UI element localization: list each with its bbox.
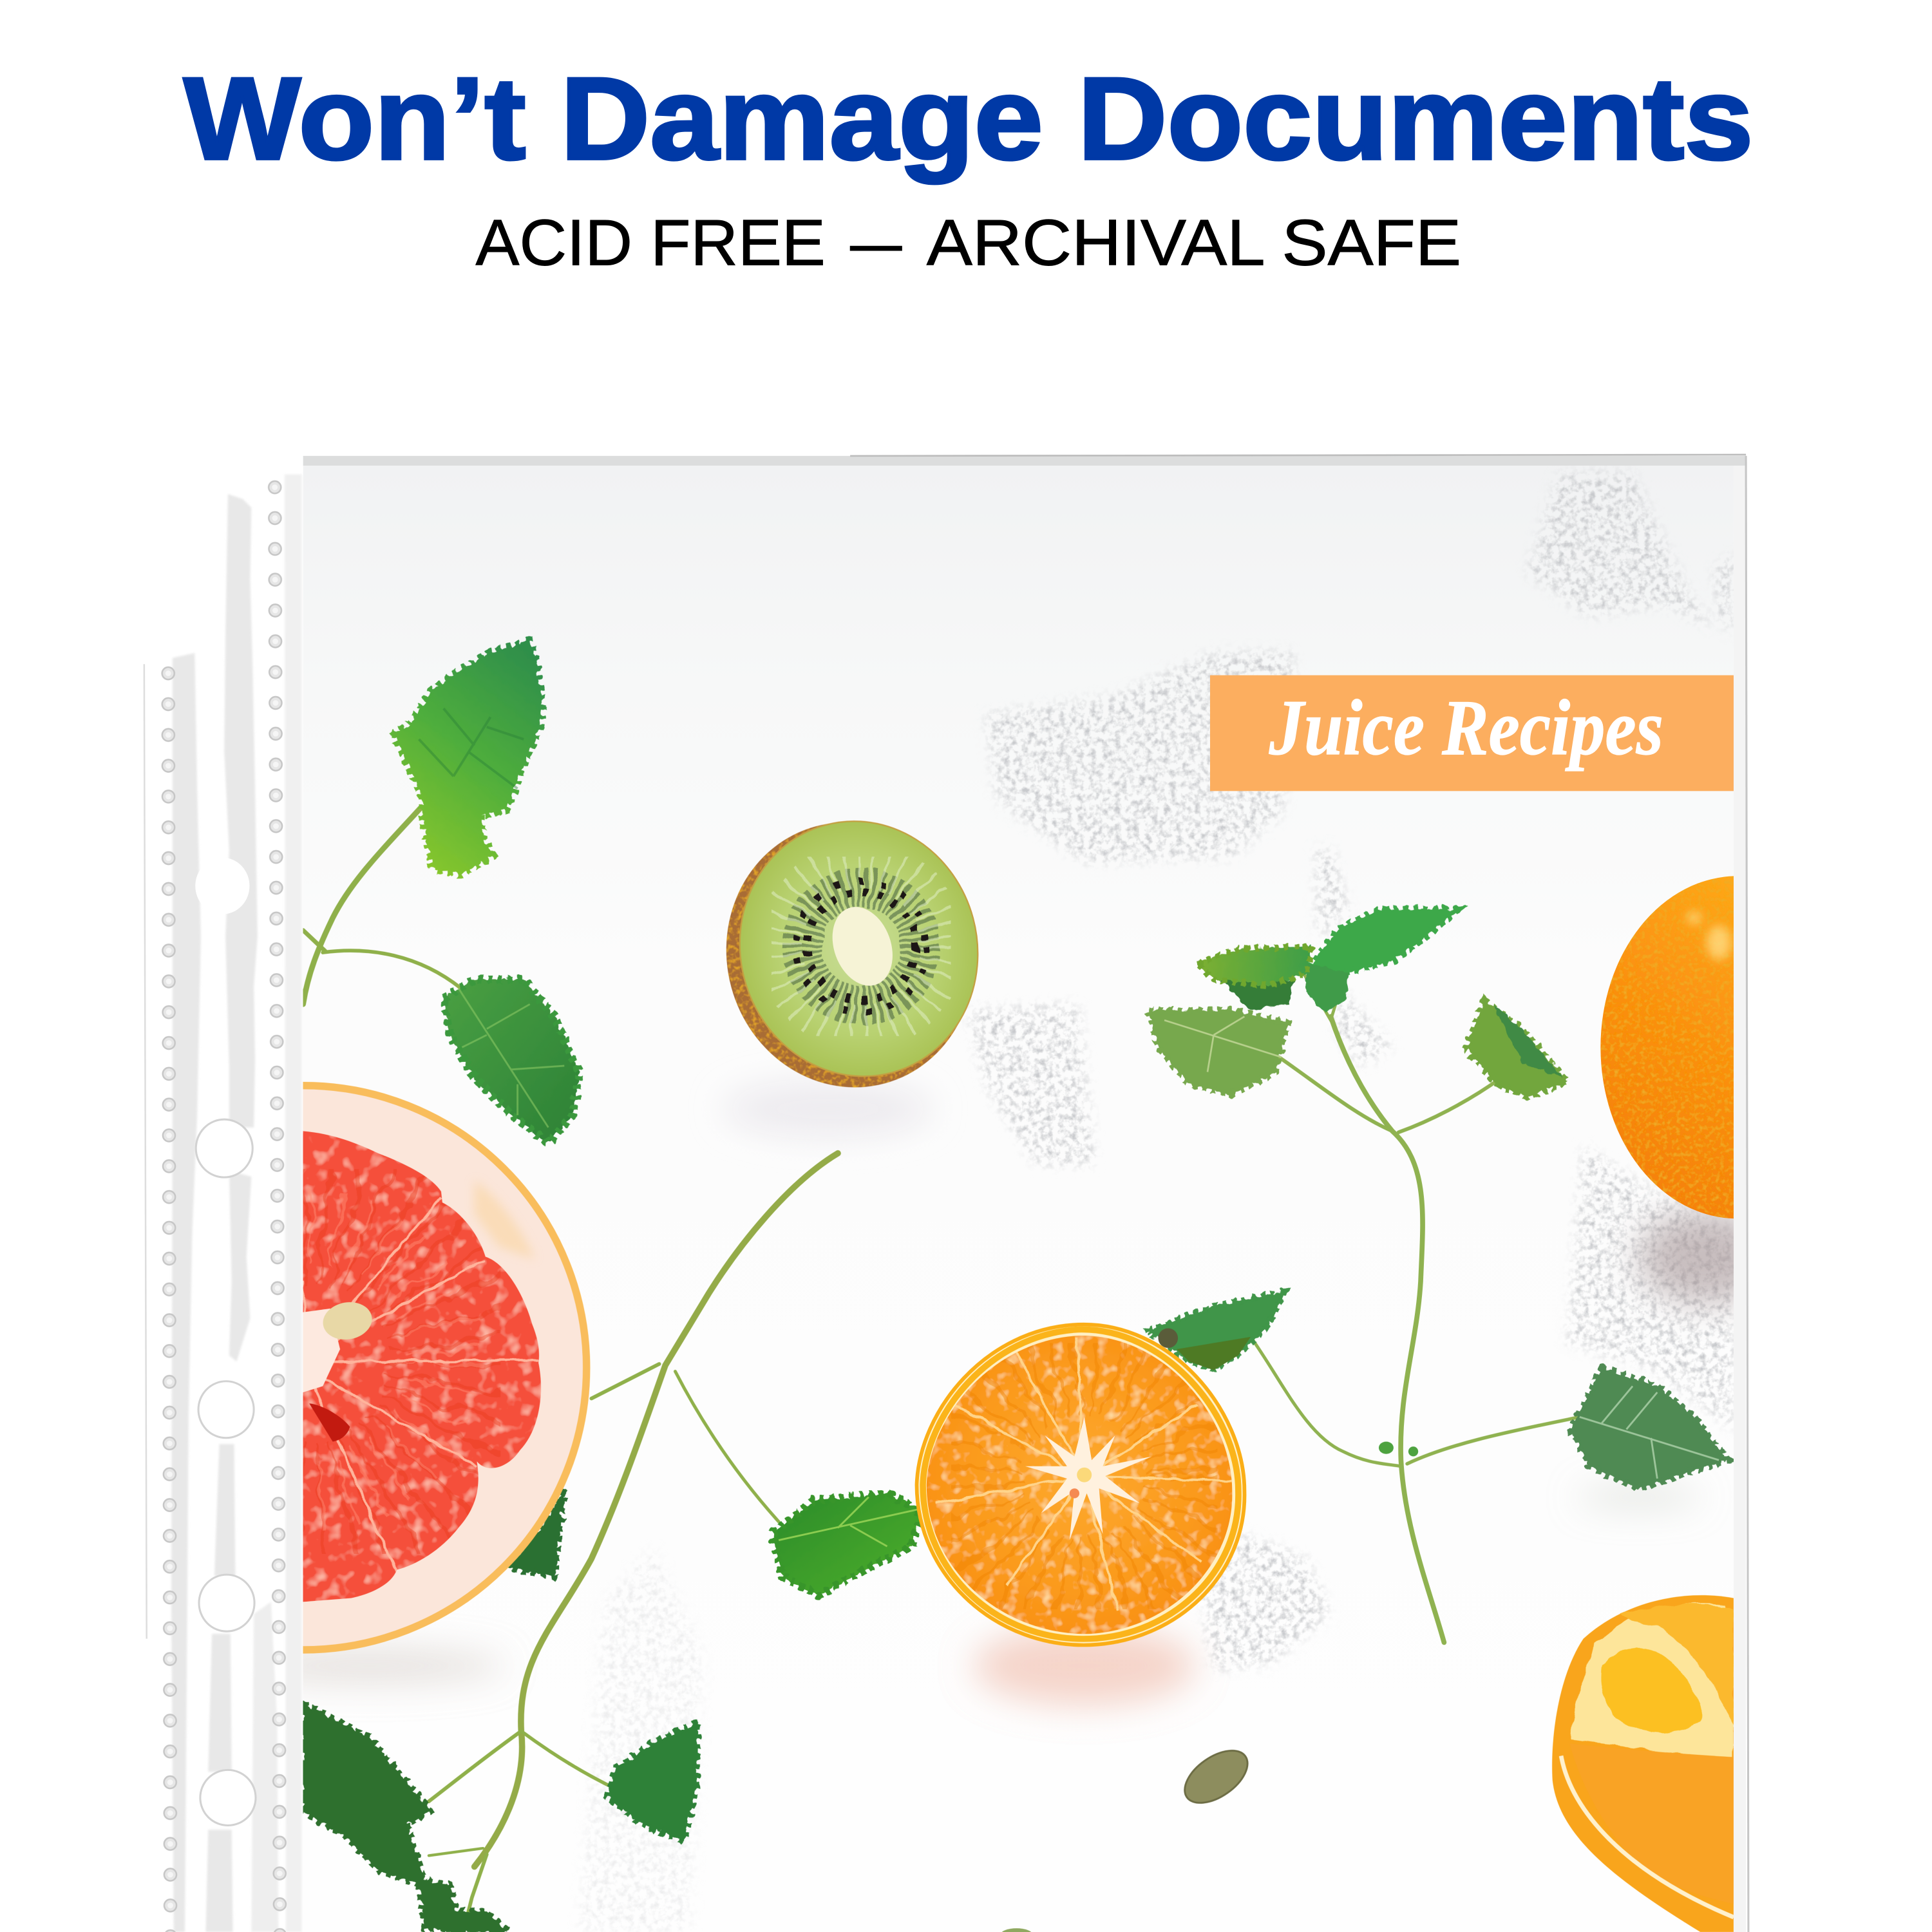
small leaf tip at bottom edge bbox=[1001, 1928, 1032, 1932]
banner text: Juice Recipes bbox=[1269, 685, 1663, 772]
leaf: behind grapefruit bbox=[509, 1491, 564, 1577]
subtitle bbox=[476, 206, 1461, 279]
pumpkin seed bbox=[1175, 1740, 1256, 1814]
pulp vesicles and membranes bbox=[148, 1198, 538, 1575]
marble background bbox=[303, 466, 1734, 685]
marble texture patches bbox=[579, 475, 1734, 1932]
rays bbox=[802, 887, 920, 1005]
grapefruit half bbox=[303, 1082, 591, 1654]
skin bbox=[697, 795, 1003, 1115]
white star pith bbox=[1025, 1417, 1152, 1540]
sheet protector: punched binding strip bbox=[143, 459, 303, 1932]
seed bbox=[320, 1298, 375, 1343]
shadows bbox=[234, 1082, 1774, 1705]
small buds bbox=[1379, 1442, 1418, 1456]
embossed weld dots, inner column bbox=[267, 472, 287, 1932]
whole orange bbox=[1600, 876, 1874, 1218]
left thin edge line bbox=[144, 664, 147, 1639]
photo insert: fruit on white marble bbox=[303, 466, 1734, 1932]
subtitle: — bbox=[850, 206, 902, 279]
seeds bbox=[807, 892, 916, 1001]
leaf: sprig left bbox=[1148, 1010, 1287, 1094]
dark pulp gap bbox=[309, 1403, 350, 1442]
flesh bbox=[303, 1131, 541, 1602]
gray film bands bbox=[171, 475, 302, 1932]
leaf: lower centre mint bbox=[773, 1493, 922, 1596]
rind glow upper right bbox=[475, 1180, 535, 1259]
rind bbox=[20, 1086, 587, 1650]
core bbox=[303, 1309, 340, 1392]
rim bbox=[916, 1325, 1244, 1645]
leaf: sprig right bbox=[1466, 1001, 1567, 1097]
sheet protector: top and right film edges bbox=[303, 455, 1748, 1932]
embossed weld dots, outer column bbox=[161, 658, 178, 1932]
leaf: mint right of stem bbox=[444, 980, 579, 1144]
left stems bbox=[303, 807, 838, 1922]
subtitle: ARCHIVAL SAFE bbox=[927, 206, 1461, 279]
title: Won’t Damage Documents bbox=[184, 53, 1754, 184]
flesh bbox=[927, 1336, 1232, 1634]
leaf: sprig top right bbox=[1306, 909, 1457, 1013]
kiwi half bbox=[697, 794, 1006, 1115]
leaf: lower sprig right bbox=[607, 1723, 697, 1841]
leaf: beside mandarin bbox=[1148, 1291, 1285, 1370]
mandarin half bbox=[916, 1325, 1244, 1645]
segment membranes bbox=[935, 1337, 1232, 1612]
core bbox=[822, 898, 903, 994]
cut face bbox=[712, 794, 1006, 1103]
right sprig stems bbox=[1251, 973, 1580, 1642]
leaf: far right sprig bbox=[1571, 1368, 1727, 1488]
leaf: sprig top left pair bbox=[1198, 946, 1312, 1010]
strip edge outline bbox=[143, 459, 303, 1932]
punched holes bbox=[195, 858, 256, 1826]
vesicles bbox=[935, 1337, 1232, 1612]
leaves: bottom-left dark mint bbox=[303, 1704, 507, 1932]
label banner bbox=[1210, 675, 1734, 791]
subtitle: ACID FREE bbox=[476, 206, 826, 279]
orange wedge, bottom right bbox=[1552, 1595, 1734, 1932]
leaf: upper mint bbox=[394, 641, 542, 875]
